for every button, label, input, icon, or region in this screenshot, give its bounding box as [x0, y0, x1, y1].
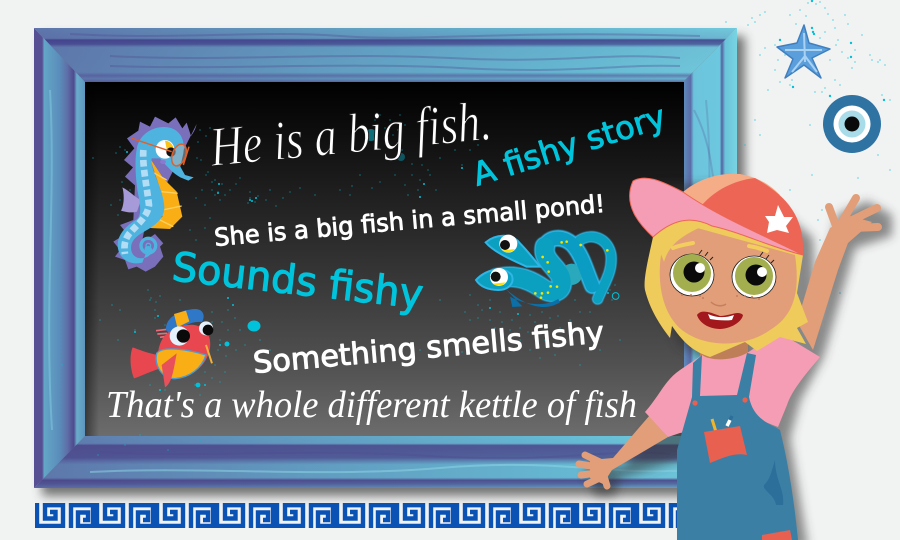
- seahorse eye: [156, 140, 174, 159]
- fish body: [158, 325, 210, 379]
- eyes: [670, 250, 776, 298]
- chalkboard surface: [85, 82, 684, 436]
- overall buttons: [692, 397, 748, 406]
- back eel tail: [580, 237, 611, 299]
- ear right: [780, 267, 796, 303]
- overalls: [677, 353, 798, 540]
- seahorse back spots: [124, 150, 149, 254]
- fish gill: [156, 329, 168, 337]
- text: Something smells fishy: Something smells fishy: [252, 315, 605, 381]
- chalkboard frame: [34, 28, 745, 496]
- hair fringe: [653, 218, 712, 262]
- seahorse glasses: [132, 138, 189, 168]
- mouth: [697, 312, 743, 329]
- fish tail: [131, 347, 161, 378]
- fish eyes: [170, 321, 213, 346]
- cap crown: [675, 174, 803, 255]
- cap brim: [630, 178, 803, 255]
- overall dark mark: [764, 460, 783, 505]
- cap star: [765, 205, 793, 233]
- eel eyes: [490, 235, 517, 286]
- seahorse cheek: [160, 160, 166, 164]
- seahorse illustration: [113, 117, 197, 272]
- text: A fishy story: A fishy story: [468, 97, 670, 194]
- eels illustration: [476, 235, 619, 307]
- eyebrows: [673, 243, 767, 251]
- fish cap: [166, 309, 204, 336]
- large paint drops: [196, 129, 405, 387]
- lowered arm: [579, 415, 668, 486]
- back eel head: [486, 236, 540, 267]
- eels inner disc: [561, 264, 582, 285]
- freckles and nose: [682, 295, 759, 306]
- icon: evil eye charm: [823, 95, 881, 153]
- front eel fin and tummy: [505, 288, 560, 307]
- seahorse tail spiral: [141, 238, 156, 253]
- red fish illustration: [131, 309, 213, 387]
- face: [660, 226, 797, 344]
- icon: blue starfish: [777, 25, 830, 78]
- character shadow: [585, 184, 892, 540]
- raised arm: [797, 198, 878, 350]
- middle eel loop: [545, 238, 592, 286]
- hair: [645, 195, 808, 357]
- paint splatter on board and paper: [62, 0, 890, 455]
- eels glow outline: [497, 237, 611, 299]
- eel yellow spots: [535, 242, 607, 298]
- pocket with pens: [704, 416, 747, 463]
- seahorse body: [118, 127, 194, 263]
- fish yellow shirt: [156, 349, 206, 379]
- fish pencil: [206, 345, 212, 363]
- girl character: [579, 174, 892, 540]
- seahorse spiky fin: [113, 117, 197, 272]
- front eel body: [497, 247, 562, 292]
- fish fin: [162, 353, 177, 387]
- front eel head: [476, 270, 513, 290]
- text: She is a big fish in a small pond: She is a big fish in a small pond!: [213, 189, 606, 252]
- pink shirt: [645, 334, 820, 437]
- neck: [700, 330, 748, 362]
- text: That's a whole different kettle of fish: That's a whole different kettle of fish: [106, 384, 637, 426]
- greek key border: [35, 503, 683, 528]
- seahorse side fin: [121, 187, 141, 212]
- text: Sounds fishy: Sounds fishy: [170, 244, 425, 318]
- small copyright mark: [612, 293, 619, 299]
- red hem: [762, 530, 792, 540]
- seahorse belly: [150, 158, 182, 229]
- text: He is a big fish: He is a big fish.: [207, 90, 494, 179]
